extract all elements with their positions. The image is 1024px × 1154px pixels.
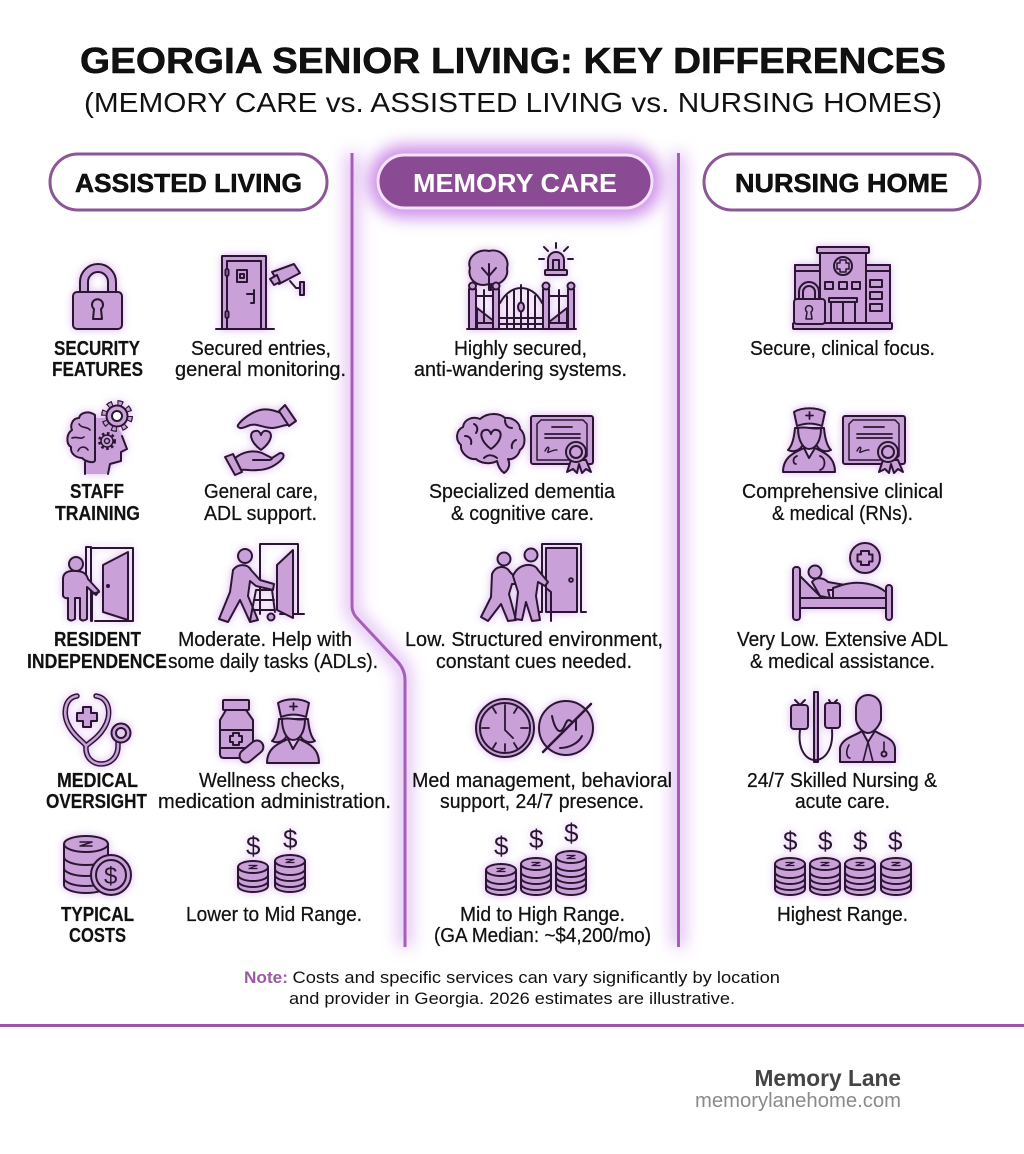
label: medical oversight: MEDICAL xyxy=(57,770,138,792)
icon: four coin stacks: $ xyxy=(853,826,868,856)
text: comprehensive clinical: & medical (RNs). xyxy=(772,503,913,525)
text: low structured environment xyxy=(405,629,663,673)
heading pill: nursing home xyxy=(704,154,980,210)
icon: hospital with padlock xyxy=(793,247,892,329)
icon: four coin stacks: $ xyxy=(783,826,798,856)
label: medical oversight: OVERSIGHT xyxy=(46,791,147,813)
divider glow: right line xyxy=(672,153,686,947)
note xyxy=(244,968,780,1008)
icon: resident with cane at door xyxy=(63,547,133,621)
text: secured entries: general monitoring. xyxy=(175,359,346,381)
subtitle: (MEMORY CARE vs. ASSISTED LIVING vs. NURSING HOMES) xyxy=(84,87,942,118)
text: very low: Very Low. Extensive ADL xyxy=(737,629,948,651)
panel: nursing home xyxy=(704,154,980,926)
text: skilled nursing: 24/7 Skilled Nursing & xyxy=(747,770,938,792)
heading pill: memory care: MEMORY CARE xyxy=(413,168,617,198)
note: and provider in Georgia. 2026 estimates are illustrative. xyxy=(289,989,735,1008)
label: resident independence: INDEPENDENCE xyxy=(27,651,167,673)
label: resident independence: RESIDENT xyxy=(54,629,141,651)
icon: caring hands and heart xyxy=(225,405,296,475)
icon: IV drip and doctor xyxy=(791,692,895,762)
text: med management xyxy=(412,770,672,813)
footer brand xyxy=(695,1065,901,1112)
icon: three coin stacks: $ xyxy=(494,831,509,861)
text: wellness checks: Wellness checks, xyxy=(199,770,345,792)
text: lower to mid range: Lower to Mid Range. xyxy=(186,904,362,926)
text: moderate help: Moderate. Help with xyxy=(178,629,352,651)
text: mid to high range: Mid to High Range. xyxy=(460,904,625,926)
icon: two coin stacks: $ xyxy=(246,831,261,861)
heading pill: assisted living: ASSISTED LIVING xyxy=(75,168,302,198)
label: typical costs xyxy=(61,904,134,947)
icon: caregiver helping resident to door xyxy=(481,544,586,621)
icon: four coin stacks: $ xyxy=(888,826,903,856)
icon: coin stack and coin xyxy=(64,836,131,895)
icon: three coin stacks: $ xyxy=(564,818,579,848)
icon: patient in bed with medical cross xyxy=(793,543,892,620)
divider glow: left line xyxy=(352,153,405,947)
label: typical costs: TYPICAL xyxy=(61,904,134,926)
text: skilled nursing xyxy=(747,770,938,813)
text: highly secured: anti-wandering systems. xyxy=(414,359,627,381)
text: highly secured xyxy=(414,338,627,381)
text: mid to high range: (GA Median: ~$4,200/mo) xyxy=(434,925,651,947)
text: general care xyxy=(204,481,318,525)
label: typical costs: COSTS xyxy=(69,925,126,947)
divider: left line xyxy=(352,153,405,947)
text: highly secured: Highly secured, xyxy=(454,338,587,360)
icon: stethoscope xyxy=(65,696,130,764)
text: secured entries xyxy=(175,338,346,381)
text: secure clinical focus: Secure, clinical focus. xyxy=(750,338,935,360)
icon: three coin stacks: $ xyxy=(529,824,544,854)
icon: padlock xyxy=(73,264,122,329)
text: very low: & medical assistance. xyxy=(750,651,935,673)
icon: person with walker at door xyxy=(219,544,304,622)
text: very low xyxy=(737,629,948,673)
heading pill: assisted living xyxy=(50,154,327,210)
icon: nurse and certificate xyxy=(783,408,905,473)
label: security features xyxy=(52,338,143,381)
divider: right line xyxy=(677,153,680,947)
note: Note: xyxy=(244,968,288,987)
text: specialized dementia: Specialized dementia xyxy=(429,481,616,503)
text: highest range: Highest Range. xyxy=(777,904,908,926)
text: low structured environment: Low. Structured environment, xyxy=(405,629,663,651)
label: security features: SECURITY xyxy=(54,338,141,360)
label: security features: FEATURES xyxy=(52,359,143,381)
icon: two coin stacks: $ xyxy=(283,824,298,854)
icon: three coin stacks xyxy=(486,818,586,895)
label: staff training xyxy=(55,481,140,525)
footer brand: Memory Lane xyxy=(754,1065,901,1091)
icon: four coin stacks xyxy=(775,826,911,895)
note: Costs and specific services can vary significantly by location xyxy=(292,968,780,987)
icon: coin stack and coin: $ xyxy=(104,863,117,890)
icon: brain head with gears xyxy=(67,404,129,474)
text: general care: General care, xyxy=(204,481,318,503)
icon: medicine bottle and nurse xyxy=(220,699,319,765)
heading pill: nursing home: NURSING HOME xyxy=(735,168,948,198)
label: staff training: STAFF xyxy=(70,481,124,503)
text: specialized dementia: & cognitive care. xyxy=(451,503,594,525)
text: mid to high range xyxy=(434,904,651,947)
text: med management: support, 24/7 presence. xyxy=(440,791,644,813)
label: medical oversight xyxy=(46,770,147,813)
icon: two coin stacks xyxy=(238,824,305,892)
label: staff training: TRAINING xyxy=(55,503,140,525)
icon: door and security camera xyxy=(216,256,304,329)
text: specialized dementia xyxy=(429,481,616,525)
icon: clock and no-wandering sign xyxy=(476,699,593,757)
panel: memory care xyxy=(368,145,672,947)
icon: four coin stacks: $ xyxy=(818,826,833,856)
text: med management: Med management, behavioral xyxy=(412,770,672,792)
text: wellness checks xyxy=(158,770,391,813)
text: moderate help: some daily tasks (ADLs). xyxy=(168,651,378,673)
text: moderate help xyxy=(168,629,378,673)
icon: brain with heart and certificate xyxy=(457,414,593,473)
icon: secured gate, tree and alarm xyxy=(467,243,576,329)
text: comprehensive clinical: Comprehensive clinical xyxy=(742,481,943,503)
label: resident independence xyxy=(27,629,167,673)
title: GEORGIA SENIOR LIVING: KEY DIFFERENCES xyxy=(80,40,946,81)
text: skilled nursing: acute care. xyxy=(795,791,890,813)
footer brand: memorylanehome.com xyxy=(695,1090,901,1112)
text: low structured environment: constant cues needed. xyxy=(436,651,632,673)
text: general care: ADL support. xyxy=(204,503,317,525)
heading pill: memory care xyxy=(368,145,662,218)
text: comprehensive clinical xyxy=(742,481,943,525)
text: secured entries: Secured entries, xyxy=(191,338,331,360)
text: wellness checks: medication administration. xyxy=(158,791,391,813)
panel: assisted living xyxy=(27,154,391,947)
